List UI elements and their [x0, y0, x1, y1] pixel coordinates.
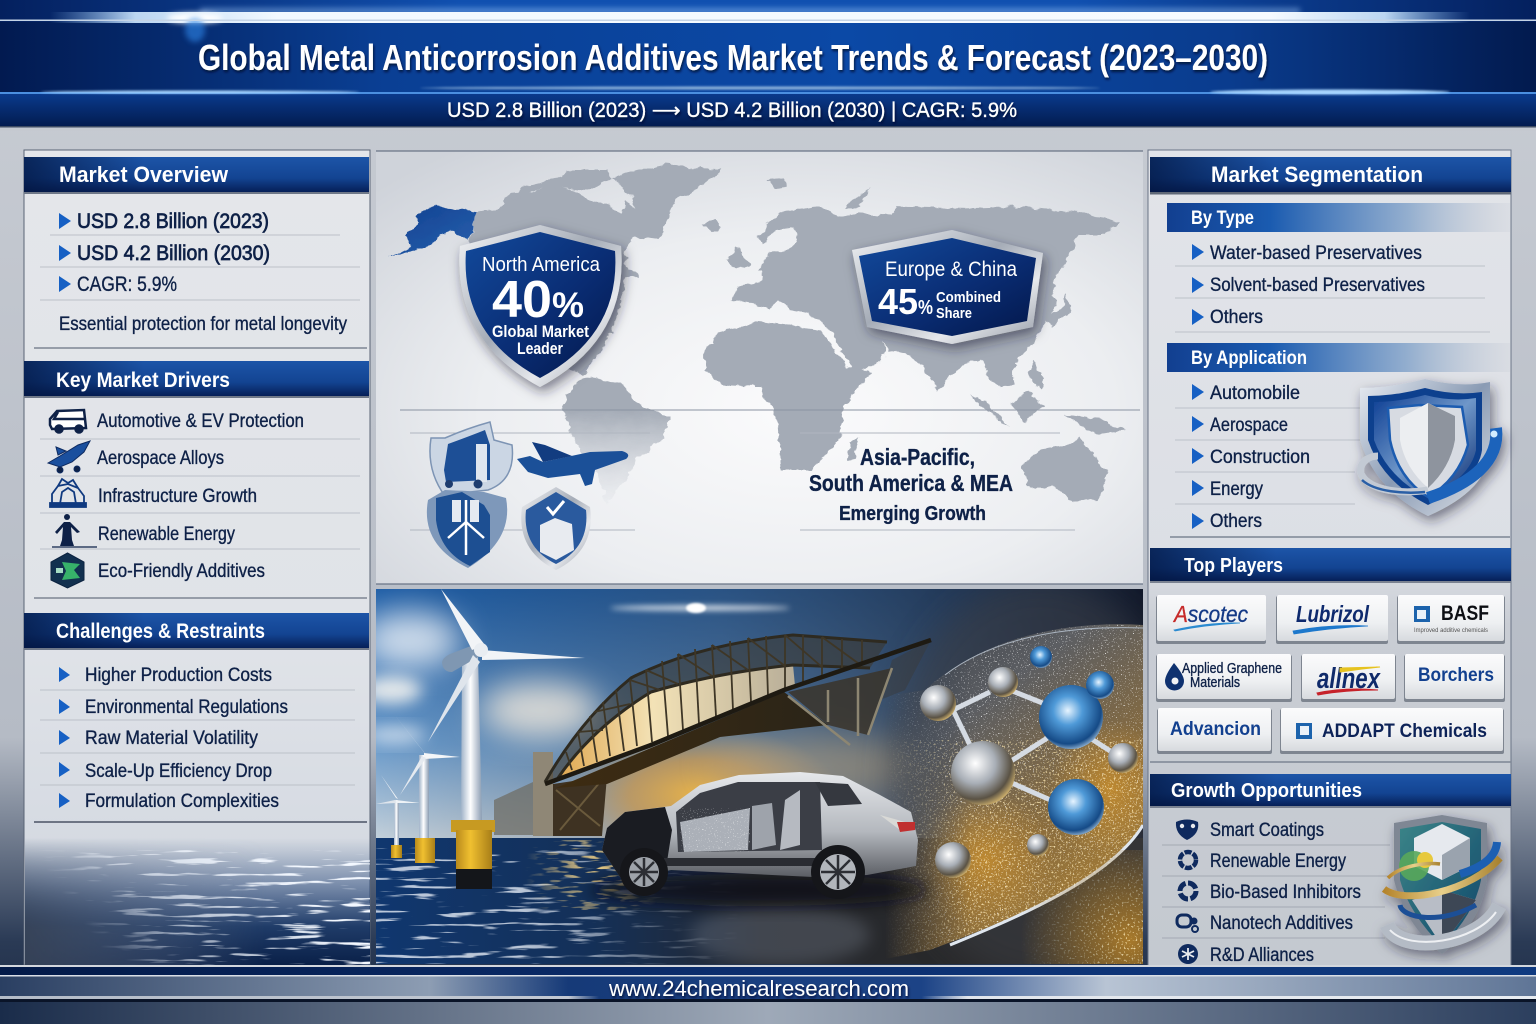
challenge 4: Scale-Up Efficiency Drop [85, 761, 272, 782]
opportunity: bio-based inhibitors: Bio-Based Inhibitors [1210, 882, 1361, 903]
heading [1150, 774, 1511, 808]
section: key market drivers [24, 361, 369, 598]
opportunity: R&D alliances [1178, 944, 1314, 966]
combined share: % [918, 297, 933, 319]
bridge: far span and towers [494, 752, 607, 836]
website url: www.24chemicalresearch.com [608, 976, 909, 1001]
panel: right column [1148, 150, 1511, 968]
subsection: by application [1167, 343, 1510, 372]
share value: % [552, 286, 584, 325]
application item 3: Construction [1210, 447, 1310, 468]
type item 2: Solvent-based Preservatives [1210, 275, 1425, 296]
icon: renewable energy figure [52, 514, 97, 547]
opportunity: renewable energy: Renewable Energy [1210, 851, 1346, 872]
challenge 2: Environmental Regulations [85, 697, 288, 718]
region name: Europe & China [885, 258, 1017, 281]
icon: aerospace plane [48, 441, 90, 473]
text: emerging regions: South America & MEA [809, 470, 1013, 496]
opportunity: smart coatings [1176, 820, 1324, 841]
icon: tower shield [427, 490, 507, 568]
text: emerging regions: Emerging Growth [839, 503, 986, 525]
photo: sky and water [360, 589, 1143, 965]
combined share: 45 [878, 281, 918, 322]
logo: Borchers: Borchers [1418, 665, 1494, 686]
share caption: Leader [517, 339, 563, 358]
driver label: Renewable Energy [98, 524, 235, 545]
turbine: small [376, 775, 420, 858]
logo: Applied Graphene Materials: Applied Graphene [1182, 660, 1282, 677]
icon: box shield with check [521, 487, 591, 570]
challenge 1: Higher Production Costs [85, 665, 272, 686]
bridge: arch truss [545, 635, 887, 782]
share value: 40 [492, 271, 552, 329]
heading: Key Market Drivers [56, 369, 230, 392]
photo: car cutaway [590, 772, 930, 906]
section: market segmentation [1150, 157, 1511, 537]
heading: Market Overview [59, 162, 229, 187]
opportunity: R&D alliances: R&D Alliances [1210, 945, 1314, 966]
title: Global Metal Anticorrosion Additives Market Trends & Forecast (2023–2030) [198, 37, 1268, 78]
share value [492, 271, 584, 329]
turbine: medium [400, 722, 460, 863]
heading: Top Players [1184, 555, 1283, 577]
share caption [492, 322, 589, 358]
logo: Applied Graphene Materials [1156, 654, 1292, 702]
photo: bridge [494, 635, 931, 836]
callout: Europe and China shield [852, 230, 1043, 344]
application item 5: Others [1210, 511, 1262, 532]
heading [24, 361, 369, 398]
driver label: Aerospace Alloys [97, 448, 224, 469]
text: emerging regions: Asia-Pacific, [860, 444, 975, 470]
photo: wind turbines [376, 589, 585, 889]
logo: BASF: BASF [1441, 602, 1489, 625]
combined share: Combined [936, 289, 1001, 306]
heading [24, 613, 369, 650]
car wheel: front [620, 848, 668, 896]
subtitle: market size and CAGR: USD 2.8 Billion (2023) ⟶ USD 4.2 Billion (2030) | CAGR: 5.9% [447, 99, 1017, 122]
icon: car [50, 410, 86, 432]
logo: BASF: Improved additive chemicals [1414, 627, 1489, 634]
logo: Applied Graphene Materials: Materials [1190, 674, 1240, 691]
header banner [0, 0, 1536, 131]
logo: Borchers [1404, 654, 1505, 702]
panel: application imagery [376, 589, 1143, 964]
logo: ADDAPT Chemicals: ADDAPT Chemicals [1322, 721, 1487, 742]
heading: Market Segmentation [1211, 162, 1423, 187]
logo: Advancion: Advancion [1170, 719, 1261, 740]
driver label: Infrastructure Growth [98, 486, 257, 507]
turbine: large [428, 589, 585, 889]
heading [1150, 157, 1511, 194]
subsection: by application: By Application [1191, 348, 1307, 369]
combined share: Share [936, 305, 972, 322]
logo: BASF [1397, 595, 1505, 644]
panel: left column [24, 150, 370, 965]
type item 1: Water-based Preservatives [1210, 243, 1422, 264]
fact: CAGR: CAGR: 5.9% [77, 273, 177, 296]
heading: Challenges & Restraints [56, 620, 265, 643]
type item 3: Others [1210, 307, 1263, 328]
bridge: deck and underside [545, 640, 931, 788]
heading [24, 157, 369, 194]
logo: Lubrizol: Lubrizol [1296, 601, 1369, 627]
driver label: Automotive & EV Protection [97, 411, 304, 432]
icon: eco hexagon [51, 553, 84, 588]
application item 5 [1192, 511, 1262, 532]
subsection: by type [1167, 203, 1510, 232]
region name: North America [482, 254, 601, 276]
combined share [878, 281, 1001, 322]
share caption: Global Market [492, 322, 589, 341]
logo: ADDAPT Chemicals [1280, 708, 1504, 754]
section: market overview [24, 157, 369, 348]
panel: world map [376, 151, 1143, 584]
fact: 2030 size: USD 4.2 Billion (2030) [77, 242, 270, 265]
icon: infrastructure dome [50, 479, 86, 507]
icon: growth shield with rings [1384, 815, 1500, 954]
logo: Lubrizol [1276, 595, 1388, 644]
application item 4 [1192, 479, 1263, 500]
ocean backdrop [25, 838, 370, 965]
car wheel: rear [811, 845, 865, 890]
map: continents [388, 165, 1125, 503]
heading [1150, 548, 1511, 583]
logo: allnex [1301, 654, 1396, 702]
section: growth opportunities [1150, 774, 1511, 966]
application item 2: Aerospace [1210, 415, 1288, 436]
bridge: lit panels [558, 665, 795, 778]
application item 4: Energy [1210, 479, 1263, 500]
application item 1: Automobile [1210, 383, 1300, 404]
icon: airplane [517, 442, 628, 486]
driver label: Eco-Friendly Additives [98, 561, 265, 582]
challenge 5: Formulation Complexities [85, 791, 279, 812]
opportunity: nanotech additives: Nanotech Additives [1210, 913, 1353, 934]
logo: Ascotec [1156, 595, 1266, 644]
icon: protection shield [1360, 379, 1498, 516]
logo: Advancion [1157, 708, 1272, 754]
challenge 3: Raw Material Volatility [85, 728, 258, 749]
callout: North America shield [459, 225, 622, 387]
logo: allnex: allnex [1317, 663, 1381, 695]
footer [0, 965, 1536, 1024]
fact: 2023 size: USD 2.8 Billion (2023) [77, 210, 269, 233]
tagline: Essential protection for metal longevity [59, 314, 347, 335]
section: challenges and restraints [24, 613, 369, 822]
logo: Ascotec: Ascotec [1172, 601, 1248, 627]
section: top players [1150, 548, 1511, 762]
opportunity: smart coatings: Smart Coatings [1210, 820, 1324, 841]
text: emerging regions [809, 444, 1013, 525]
photo: molecule [920, 646, 1138, 878]
icon: truck shield [430, 422, 512, 496]
map: Alaska highlight [388, 207, 477, 257]
subsection: by type: By Type [1191, 208, 1254, 229]
photo: coated surface with speckle [880, 589, 1143, 964]
heading: Growth Opportunities [1171, 780, 1362, 802]
